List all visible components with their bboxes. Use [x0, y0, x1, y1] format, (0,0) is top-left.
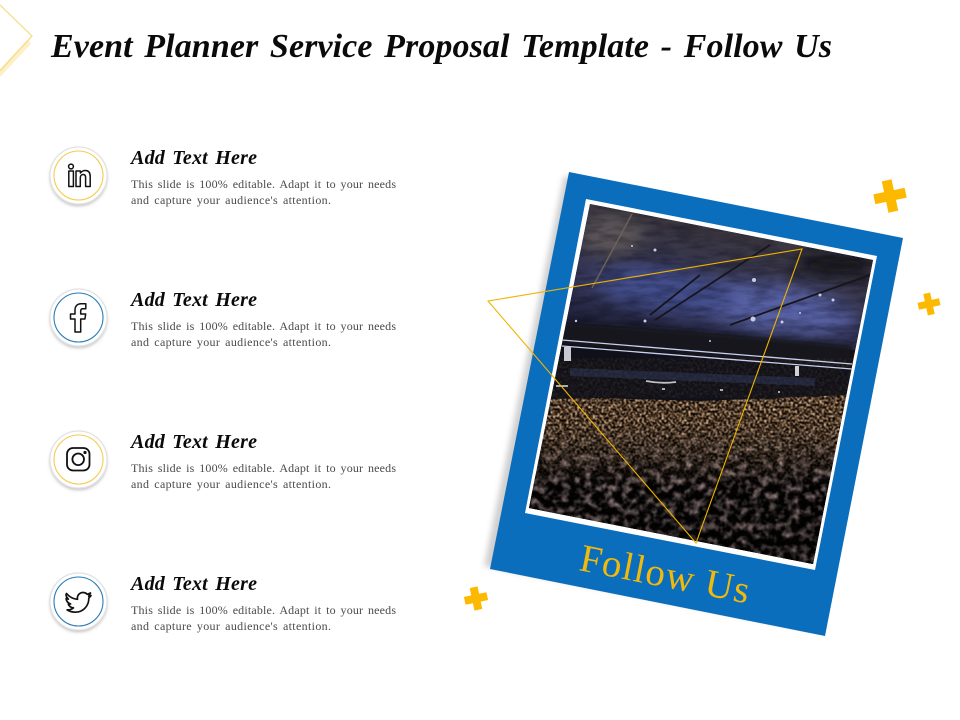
item: Facebook — [50, 289, 396, 349]
description: This slide is 100% editable. Adapt it to your needs — [131, 177, 396, 191]
title: Event Planner Service Proposal Template - Follow Us — [50, 28, 832, 65]
icon: Facebook — [50, 289, 107, 348]
icon: LinkedIn — [50, 147, 107, 206]
description: This slide is 100% editable. Adapt it to your needs — [131, 603, 396, 617]
description: and capture your audience's attention. — [131, 335, 331, 349]
description — [131, 603, 396, 633]
item: Instagram — [50, 431, 396, 491]
description: and capture your audience's attention. — [131, 619, 331, 633]
item: Twitter — [50, 573, 396, 633]
caption: Follow Us: Follow Us — [576, 537, 753, 612]
heading: Add Text Here — [129, 431, 257, 453]
description: and capture your audience's attention. — [131, 193, 331, 207]
description: and capture your audience's attention. — [131, 477, 331, 491]
description — [131, 177, 396, 207]
icon: Instagram — [50, 431, 107, 490]
corner diamond decoration — [0, 5, 32, 77]
photo frame — [525, 199, 877, 570]
plus icon: middle right — [916, 291, 942, 317]
heading: Add Text Here — [129, 573, 257, 595]
description: This slide is 100% editable. Adapt it to your needs — [131, 461, 396, 475]
stage light lines — [562, 340, 852, 369]
description — [131, 319, 396, 349]
triangle outline — [488, 249, 802, 543]
description: This slide is 100% editable. Adapt it to your needs — [131, 319, 396, 333]
stage — [550, 345, 860, 402]
heading: Add Text Here — [129, 289, 257, 311]
heading: Add Text Here — [129, 147, 257, 169]
plus icon: top right — [871, 177, 909, 215]
ceiling lights — [575, 245, 834, 342]
audience — [529, 395, 846, 564]
icon: Twitter — [50, 573, 107, 632]
plus icon: bottom left — [462, 585, 490, 612]
panel: photo card — [484, 172, 903, 636]
photo: crowded auditorium — [529, 204, 873, 564]
description — [131, 461, 396, 491]
item: LinkedIn — [50, 147, 396, 207]
